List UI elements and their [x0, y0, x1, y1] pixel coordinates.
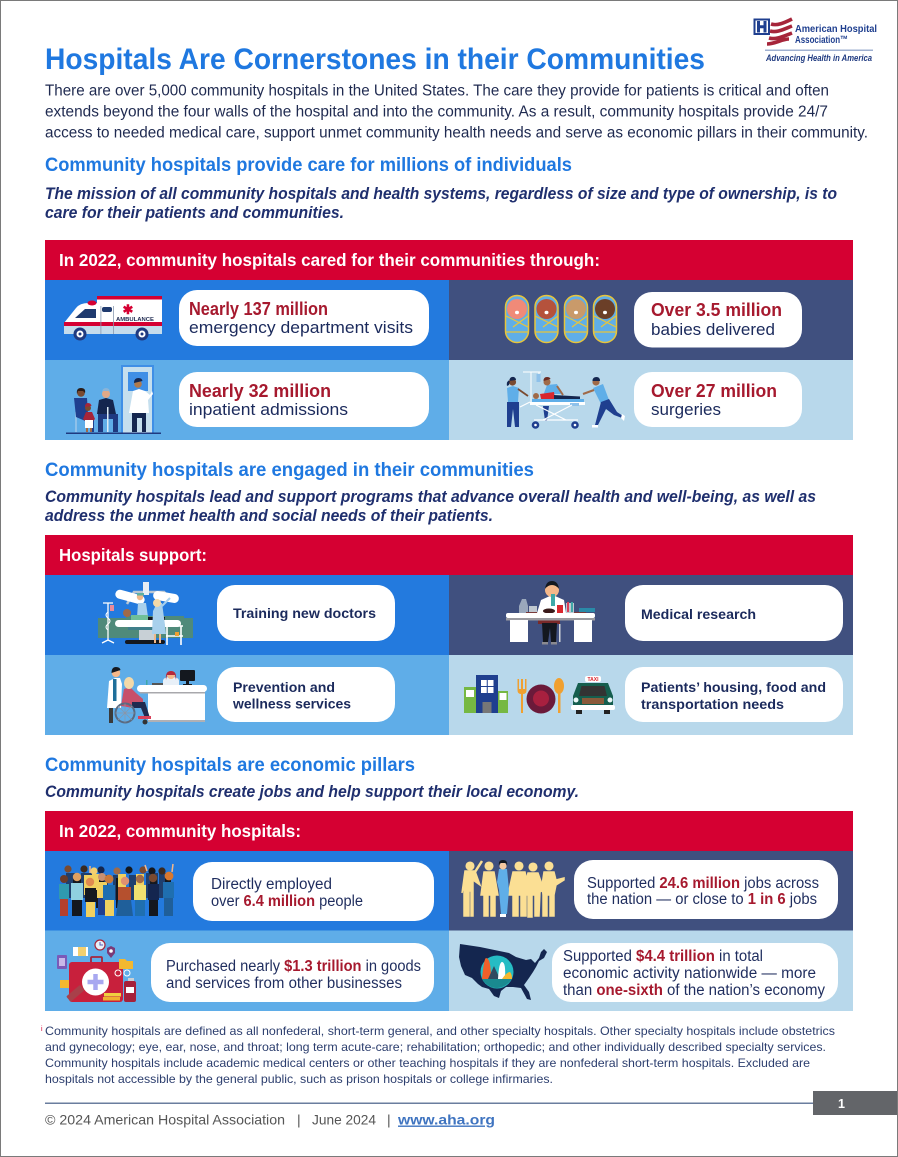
icon: wellness desk and wheelchair [107, 667, 207, 724]
intro paragraph [45, 82, 868, 142]
panel: economic impact [45, 811, 853, 1011]
heading: economic pillars: Community hospitals are economic pillars [45, 754, 415, 776]
footnote: Community hospitals include academic medical centers or other teaching hospitals if they are nonfederal short-term hospitals. Excluded are [45, 1056, 810, 1070]
footer [45, 1112, 495, 1128]
stat: surgeries: surgeries [651, 401, 721, 419]
page number [813, 1091, 897, 1115]
icon: housing, food and taxi [464, 675, 615, 714]
icon: crowd of employees [59, 864, 174, 917]
footnote: i [41, 1026, 43, 1033]
stat: inpatient admissions: inpatient admissions [189, 401, 348, 419]
icon: yellow workforce with nurse [462, 860, 564, 917]
footer: June 2024 [312, 1112, 376, 1128]
label: housing, food, transportation [625, 667, 843, 722]
label: prevention and wellness: wellness services [232, 696, 351, 712]
page number: 1 [838, 1097, 845, 1111]
label: medical research [625, 585, 843, 641]
panel heading: In 2022, community hospitals cared for their communities through: [59, 250, 600, 270]
label: medical research: Medical research [641, 606, 756, 622]
stat: surgeries [634, 372, 802, 427]
stat: purchases: Purchased nearly $1.3 trillion in goods [166, 958, 421, 975]
stat: inpatient admissions: Nearly 32 million [189, 381, 331, 401]
intro paragraph: access to needed medical care, support unmet community health needs and serve as economic pillars in their community. [45, 124, 868, 142]
stat: inpatient admissions [179, 372, 429, 427]
intro paragraph: There are over 5,000 community hospitals in the United States. The care they provide for patients is critical and often [45, 82, 829, 100]
label: prevention and wellness [217, 667, 395, 722]
logo: American Hospital Association [754, 18, 877, 64]
stat: surgeries: Over 27 million [651, 381, 777, 401]
stat: supported jobs: Supported 24.6 million jobs across [587, 875, 819, 892]
stat: emergency visits: Nearly 137 million [189, 299, 328, 319]
stat: economic activity: economic activity nationwide — more [563, 965, 816, 982]
mission statement [45, 185, 837, 222]
panel heading: In 2022, community hospitals: [59, 821, 301, 841]
engagement statement: address the unmet health and social needs of their patients. [45, 507, 493, 525]
logo: American Hospital Association: American Hospital [795, 23, 877, 35]
heading: engaged in communities: Community hospitals are engaged in their communities [45, 459, 534, 481]
economic statement: Community hospitals create jobs and help support their local economy. [45, 783, 579, 801]
icon: waiting patients and doctor [66, 365, 161, 434]
mission statement: care for their patients and communities. [45, 204, 344, 222]
panel heading: Hospitals support: [59, 545, 207, 565]
label: housing, food, transportation: Patients’ housing, food and [641, 679, 826, 695]
logo: American Hospital Association: Association™ [795, 34, 848, 46]
label: training new doctors: Training new doctors [233, 605, 376, 621]
stat: babies delivered: babies delivered [651, 321, 775, 339]
stat: direct employment: Directly employed [211, 876, 332, 893]
footer: | [297, 1112, 301, 1128]
icon: babies [506, 296, 616, 342]
panel: care in 2022 [45, 240, 853, 440]
icon: ambulance: AMBULANCE [116, 317, 155, 323]
engagement statement: Community hospitals lead and support programs that advance overall health and well-being, as well as [45, 488, 816, 506]
footer: | [387, 1112, 391, 1128]
footnote: Community hospitals are defined as all nonfederal, short-term general, and other specialty hospitals. Other specialty hospitals include obstetrics [45, 1024, 835, 1038]
icon: ambulance: ✱ [123, 302, 134, 317]
footnote: hospitals not accessible by the general public, such as prison hospitals or college infirmaries. [45, 1072, 553, 1086]
icon: housing, food and taxi: TAXI [587, 677, 599, 683]
stat: purchases: and services from other businesses [166, 975, 402, 992]
label: training new doctors [217, 585, 395, 641]
panel: hospitals support [45, 535, 853, 735]
icon: surgery team with stretcher [507, 372, 625, 429]
stat: economic activity: than one-sixth of the nation’s economy [563, 982, 825, 999]
label: prevention and wellness: Prevention and [233, 679, 335, 695]
intro paragraph: extends beyond the four walls of the hospital and into the community. As a result, community hospitals provide 24/7 [45, 104, 828, 120]
heading: care for millions: Community hospitals provide care for millions of individuals [45, 154, 572, 176]
stat: direct employment [193, 862, 434, 921]
footer: © 2024 American Hospital Association [45, 1112, 285, 1128]
footnote: and gynecology; eye, ear, nose, and throat; long term acute-care; rehabilitation; orthopedic; and other individually described specialty services. [45, 1040, 826, 1054]
icon: medical kit and supplies [57, 940, 136, 1002]
mission statement: The mission of all community hospitals and health systems, regardless of size and type of ownership, is to [45, 185, 837, 203]
footer: www.aha.org [397, 1112, 495, 1128]
icon: operating room [98, 582, 193, 645]
stat: supported jobs [574, 860, 838, 919]
stat: babies delivered [634, 292, 802, 348]
icon: medical researcher [506, 581, 595, 644]
stat: economic activity [552, 943, 838, 1002]
icon: ambulance [64, 296, 162, 340]
stat: supported jobs: the nation — or close to 1 in 6 jobs [587, 891, 817, 908]
stat: babies delivered: Over 3.5 million [651, 300, 782, 320]
engagement statement [45, 488, 816, 525]
logo: American Hospital Association: Advancing Health in America [765, 53, 872, 64]
stat: economic activity: Supported $4.4 trillion in total [563, 948, 763, 965]
footnote [41, 1024, 835, 1086]
stat: emergency visits: emergency department visits [189, 319, 413, 337]
stat: emergency visits [179, 290, 429, 346]
stat: direct employment: over 6.4 million people [211, 893, 363, 910]
label: housing, food, transportation: transportation needs [641, 696, 784, 712]
icon: US map [459, 944, 547, 1000]
title: Hospitals Are Cornerstones in their Communities [45, 43, 705, 76]
stat: purchases [151, 943, 434, 1002]
